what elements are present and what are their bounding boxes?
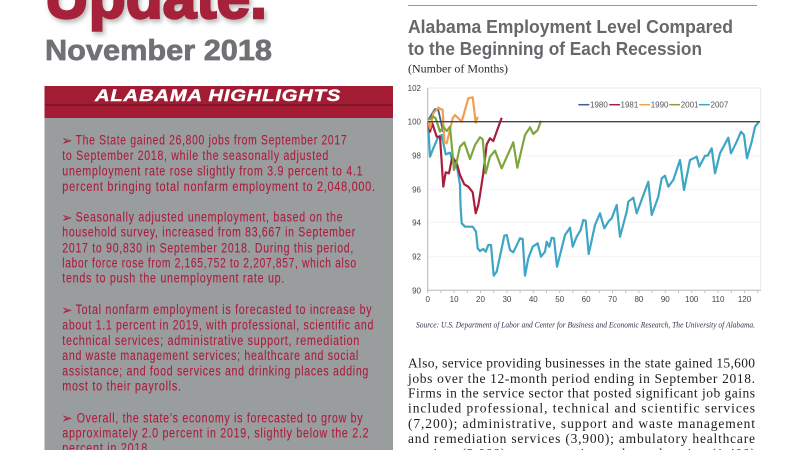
text block: highlights bullets: ➢ [62, 412, 72, 427]
text block: highlights bullets: The State gained 26,800 jobs from September 2017 [76, 133, 347, 148]
text block: highlights bullets: about 1.1 percent in 2019, with professional, scientific and [62, 317, 374, 332]
line: 2001 recession [428, 117, 541, 173]
text block: service sector paragraph: included professional, technical and scientific services [408, 401, 755, 416]
text block: highlights bullets: Overall, the state’s economy is forecasted to grow by [77, 410, 363, 425]
text block: highlights bullets: and waste management services; healthcare and social [62, 348, 359, 363]
text block: highlights bullets: assistance; and food services and drinking places adding [62, 364, 369, 379]
x-axis labels: 40 [529, 295, 538, 304]
subtitle: date: November 2018 [45, 35, 272, 67]
legend [578, 101, 729, 110]
text block: highlights bullets: percent bringing total nonfarm employment to 2,048,000. [62, 179, 376, 194]
legend: 1980 [590, 101, 608, 110]
x-axis labels: 0 [425, 295, 430, 304]
text block: highlights bullets: technical services; administrative support, remediation [62, 333, 360, 348]
x-axis labels: 70 [608, 295, 617, 304]
text block: highlights bullets: ➢ [62, 211, 72, 226]
heading: chart title [408, 16, 733, 59]
text block: highlights bullets: labor force rose from 2,165,752 to 2,207,857, which also [62, 256, 357, 271]
text block: highlights bullets [62, 133, 376, 450]
text block: service sector paragraph: Also, service providing businesses in the state gained 15,600 [408, 355, 755, 370]
text block: service sector paragraph: Firms in the service sector that posted significant job gains [408, 386, 755, 401]
banner: Alabama highlights heading: ALABAMA HIGHLIGHTS [94, 87, 341, 105]
legend: 2001 [681, 101, 699, 110]
x-axis labels [425, 295, 752, 304]
text block: highlights bullets: tends to push the unemployment rate up. [62, 271, 285, 286]
baseline at 100 [428, 121, 760, 123]
y-axis labels: 98 [412, 152, 422, 161]
banner: Alabama highlights heading [44, 86, 393, 118]
line: 1980 recession [428, 109, 443, 132]
text block: highlights bullets: ➢ [62, 134, 72, 149]
y-axis labels [408, 84, 422, 295]
text block: service sector paragraph [407, 355, 755, 450]
x-axis labels: 20 [476, 295, 485, 304]
line: 1981 recession [428, 118, 502, 213]
text block: highlights bullets: approximately 2.0 percent in 2019, slightly below the 2.2 [62, 425, 369, 440]
legend: 1981 [620, 101, 639, 110]
panel: Alabama highlights [44, 86, 393, 450]
legend: 2007 [710, 101, 729, 110]
text block: service sector paragraph: and remediation services (3,900); ambulatory healthcare [408, 431, 755, 446]
y-axis labels: 102 [408, 84, 422, 93]
text block: highlights bullets: 2017 to 90,830 in September 2018. During this period, [62, 240, 354, 255]
x-axis labels: 90 [661, 295, 670, 304]
y-axis labels: 96 [412, 185, 422, 194]
text block: service sector paragraph: (7,200); administrative, support and waste management [408, 416, 755, 431]
x-axis labels: 120 [738, 295, 752, 304]
x-axis labels: 30 [502, 295, 512, 304]
y-axis labels: 92 [412, 253, 422, 262]
line: 1990 recession [428, 97, 478, 143]
text block: highlights bullets: Seasonally adjusted unemployment, based on the [76, 210, 343, 225]
x-axis labels: 60 [582, 295, 591, 304]
x-axis labels: 100 [685, 295, 699, 304]
text block: highlights bullets: to September 2018, while the seasonally adjusted [62, 148, 329, 163]
text block: highlights bullets: Total nonfarm employment is forecasted to increase by [76, 302, 372, 317]
text block: highlights bullets: ➢ [62, 303, 72, 318]
text: chart source: Source: U.S. Department of Labor and Center for Business and Economic Research, The University of Alabama. [416, 320, 755, 330]
y-axis labels: 94 [412, 218, 422, 227]
heading: chart title: Alabama Employment Level Compared [408, 16, 733, 37]
text: chart subtitle: (Number of Months) [408, 62, 508, 76]
heading: chart title: to the Beginning of Each Recession [408, 38, 702, 59]
x-axis labels: 110 [712, 295, 725, 304]
x-axis labels: 10 [450, 295, 459, 304]
y-axis labels: 90 [412, 286, 422, 295]
text block: highlights bullets: most to their payrolls. [62, 379, 182, 394]
x-axis labels: 50 [555, 295, 565, 304]
text block: service sector paragraph: jobs over the 12-month period ending in September 2018. [407, 371, 755, 386]
line chart: employment level by recession [408, 84, 761, 304]
text block: highlights bullets: household survey, increased from 83,667 in September [62, 225, 356, 240]
y-axis labels: 100 [408, 118, 422, 127]
x-axis labels: 80 [634, 295, 644, 304]
line: 2007 recession [428, 122, 759, 276]
legend: 1990 [651, 101, 669, 110]
text block: highlights bullets: unemployment rate rose slightly from 3.9 percent to 4.1 [62, 164, 363, 179]
